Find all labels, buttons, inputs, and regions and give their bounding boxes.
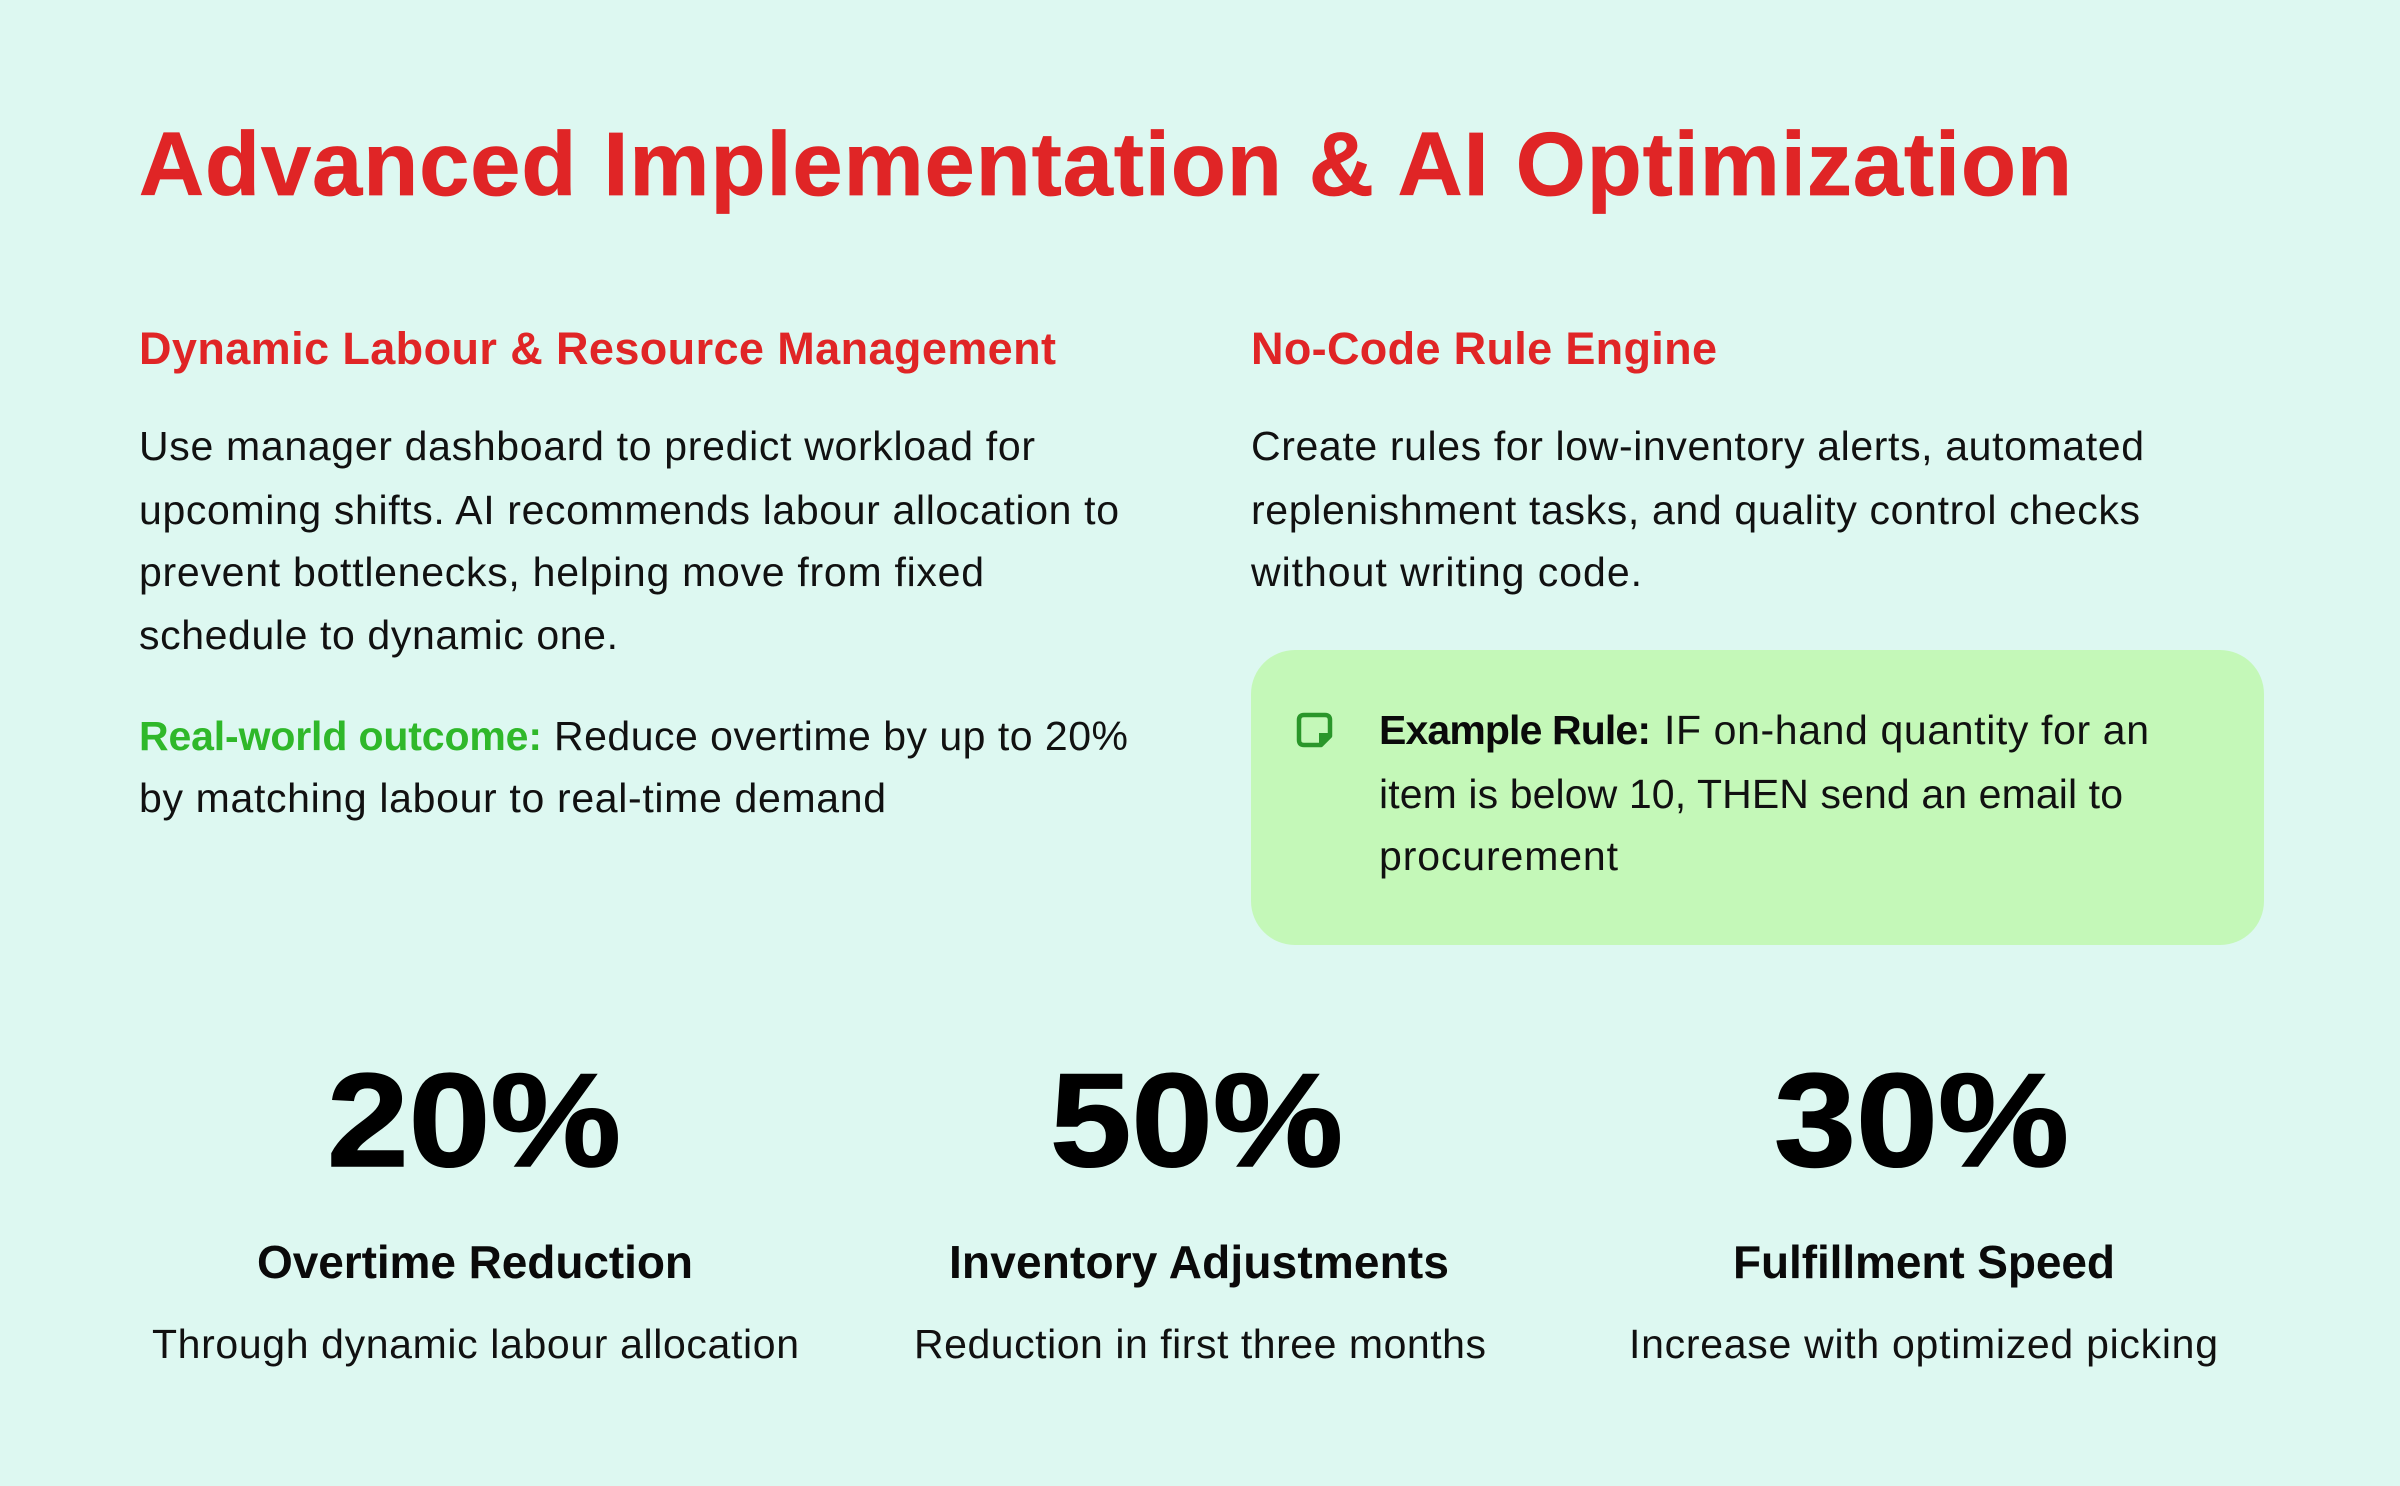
heading: no-code rule engine: No-Code Rule Engine: [1251, 323, 1717, 374]
stat: inventory adjustments: Inventory Adjustments: [949, 1236, 1449, 1288]
body text: no-code rule engine: replenishment tasks, and quality control checks: [1251, 487, 2140, 533]
body text: no-code rule engine: Create rules for low-inventory alerts, automated: [1251, 423, 2144, 469]
panel: dynamic labour: [139, 323, 1128, 821]
body text: no-code rule engine: [1250, 423, 2144, 595]
heading: dynamic labour: Dynamic Labour & Resource Management: [139, 323, 1056, 374]
stat: fulfillment speed: [1629, 1047, 2218, 1367]
stat: inventory adjustments: [914, 1047, 1486, 1367]
real-world outcome callout: Real-world outcome:: [139, 713, 542, 759]
real-world outcome callout: by matching labour to real-time demand: [139, 775, 886, 821]
body text: dynamic labour: Use manager dashboard to predict workload for: [139, 423, 1035, 469]
stat: fulfillment speed: 30%: [1774, 1047, 2069, 1195]
body text: dynamic labour: schedule to dynamic one.: [139, 612, 618, 658]
body text: dynamic labour: upcoming shifts. AI recommends labour allocation to: [139, 487, 1119, 533]
stat: overtime reduction: [152, 1047, 799, 1367]
example rule text: procurement: [1379, 833, 1619, 879]
example rule text: item is below 10, THEN send an email to: [1379, 771, 2123, 817]
stat: inventory adjustments: Reduction in first three months: [914, 1321, 1486, 1367]
example rule callout: [1251, 650, 2264, 945]
example rule text: Example Rule:: [1379, 707, 1651, 753]
example rule text: [1379, 707, 2149, 879]
panel: no-code rule engine: [1250, 323, 2264, 945]
real-world outcome callout: [139, 713, 1128, 821]
stat: overtime reduction: 20%: [327, 1047, 621, 1195]
body text: dynamic labour: prevent bottlenecks, helping move from fixed: [139, 549, 984, 595]
title: Advanced Implementation & AI Optimization: [139, 115, 2072, 215]
stat: inventory adjustments: 50%: [1050, 1047, 1343, 1195]
example rule text: IF on-hand quantity for an: [1664, 707, 2149, 753]
stat: fulfillment speed: Increase with optimized picking: [1629, 1321, 2218, 1367]
body text: dynamic labour: [139, 423, 1119, 658]
real-world outcome callout: Reduce overtime by up to 20%: [554, 713, 1128, 759]
stat: overtime reduction: Overtime Reduction: [257, 1236, 693, 1288]
stat: fulfillment speed: Fulfillment Speed: [1733, 1236, 2115, 1288]
stat: overtime reduction: Through dynamic labour allocation: [152, 1321, 799, 1367]
body text: no-code rule engine: without writing code.: [1250, 549, 1642, 595]
icon: sticky note: [1299, 715, 1332, 746]
